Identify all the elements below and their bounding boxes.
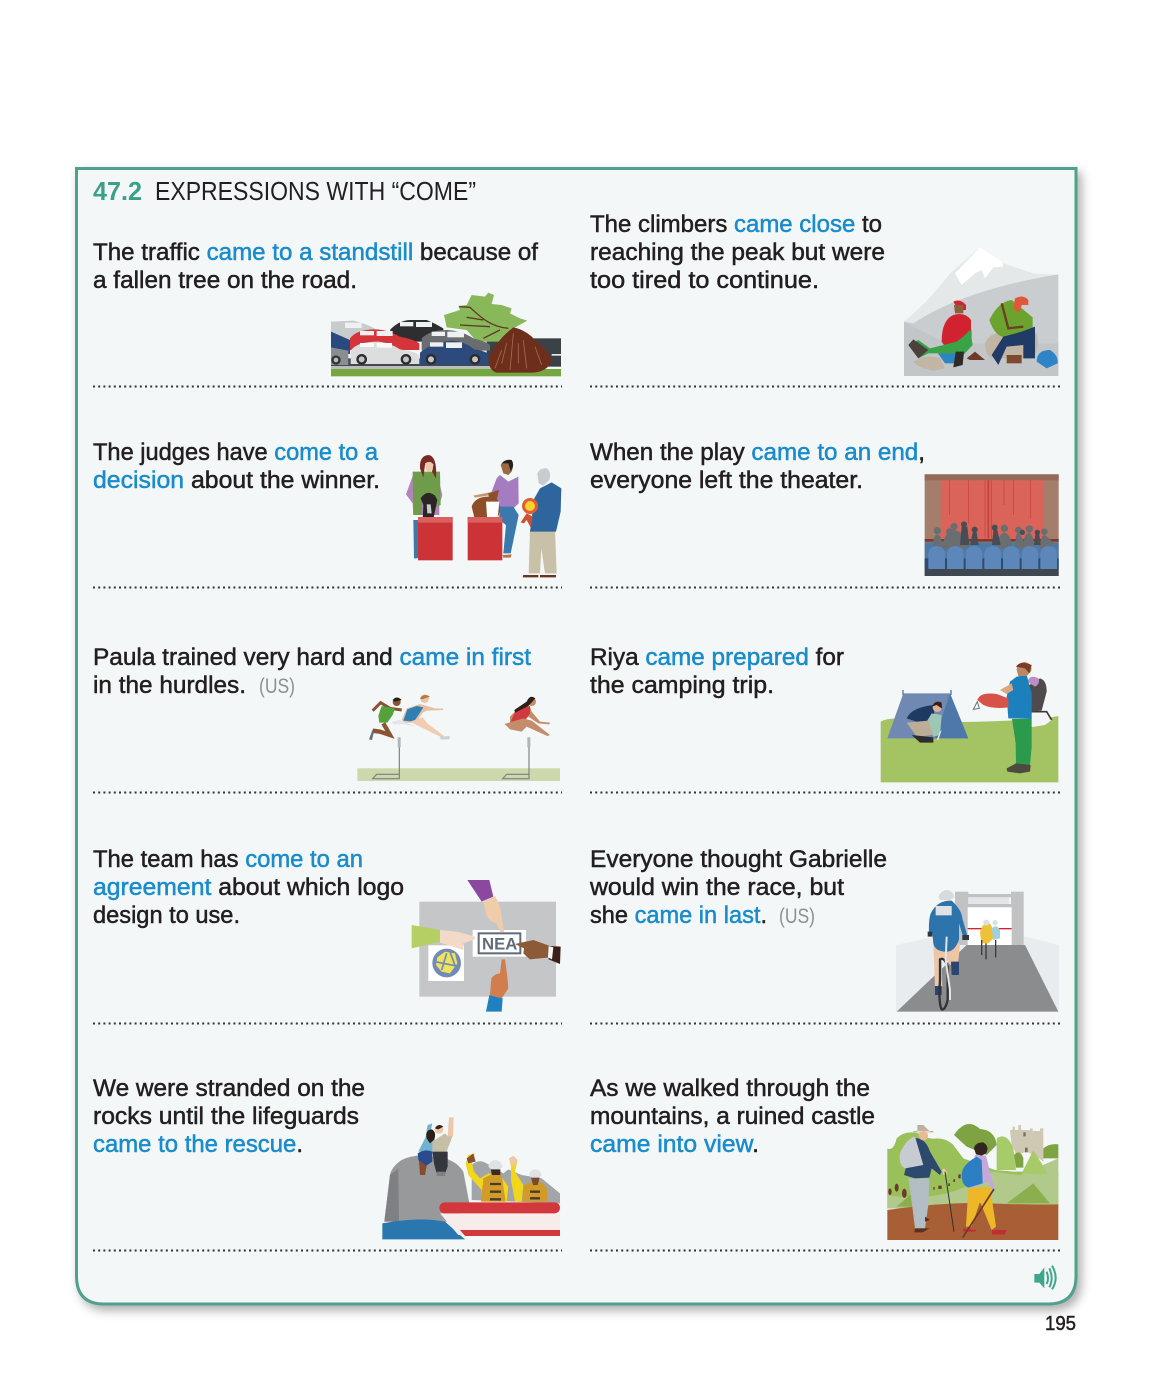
illustration: team choosing a logo: [412, 880, 561, 1012]
panel: expressions with come: [76, 168, 1076, 1304]
text: came to the rescue: rocks until the lifeguards: [93, 1103, 359, 1130]
text: came into view: [590, 1075, 875, 1158]
text: come to an agreement: design to use.: [93, 902, 240, 929]
illustration: theater audience: [925, 474, 1059, 576]
icon: audio speaker: [1034, 1266, 1056, 1289]
text: came to a standstill: [93, 239, 538, 294]
heading: EXPRESSIONS WITH “COME”: [155, 176, 476, 206]
divider row 4 right: [590, 1022, 1060, 1024]
text: came in first: Paula trained very hard and came in first: [93, 644, 531, 671]
illustration: camping trip: [881, 662, 1058, 782]
text: came to the rescue: We were stranded on the: [93, 1075, 365, 1102]
divider row 3 right: [590, 792, 1060, 794]
text: came prepared: [590, 644, 844, 699]
text: came in last: she came in last.: [590, 902, 767, 929]
divider row 4 left: [93, 1022, 562, 1024]
divider row 3 left: [93, 792, 562, 794]
text: came to the rescue: [93, 1075, 365, 1158]
text: came prepared: Riya came prepared for: [590, 644, 844, 671]
text: came to an end: When the play came to an end,: [590, 439, 925, 466]
text: came to the rescue: came to the rescue.: [93, 1131, 303, 1158]
divider row 5 right: [590, 1250, 1060, 1252]
logo lettering: NEA: [482, 934, 517, 953]
text: came to an end: everyone left the theater.: [590, 467, 863, 494]
text: came in last: [589, 846, 887, 929]
text: come to an agreement: agreement about which logo: [93, 874, 404, 901]
illustration: hurdles race: [357, 694, 560, 781]
illustration: tired climbers: [904, 247, 1058, 376]
heading: 47.2: [93, 176, 142, 206]
illustration: cyclists at finish line: [896, 890, 1059, 1012]
text: came into view: As we walked through the: [590, 1075, 870, 1102]
illustration: dog show judges: [406, 455, 561, 577]
divider row 1 left: [93, 386, 562, 388]
divider row 1 right: [590, 386, 1060, 388]
text: came prepared: the camping trip.: [590, 672, 774, 699]
divider row 2 right: [590, 586, 1060, 588]
text: came close: too tired to continue.: [590, 267, 819, 294]
text: came close: reaching the peak but were: [590, 239, 885, 266]
illustration: hikers and castle: [887, 1124, 1058, 1240]
page number: 195: [1045, 1313, 1076, 1335]
divider row 5 left: [93, 1250, 562, 1252]
text: come to an agreement: [93, 846, 404, 929]
text: came in first: [93, 644, 531, 699]
text: came to a standstill: a fallen tree on the road.: [93, 267, 357, 294]
text: came to a standstill: The traffic came to a standstill because of: [93, 239, 538, 266]
text: came close: The climbers came close to: [590, 211, 882, 238]
text: came in last: (US): [779, 905, 815, 928]
text: came in last: would win the race, but: [589, 874, 844, 901]
text: come to a decision: [93, 439, 380, 494]
text: come to a decision: The judges have come to a: [93, 439, 379, 466]
text: came in last: Everyone thought Gabrielle: [590, 846, 887, 873]
text: came into view: mountains, a ruined castle: [590, 1103, 875, 1130]
divider row 2 left: [93, 586, 562, 588]
illustration: lifeguards rescue: [382, 1117, 560, 1239]
illustration: traffic jam and fallen tree: [331, 293, 561, 376]
text: come to a decision: decision about the winner.: [93, 467, 380, 494]
text: came in first: (US): [259, 675, 295, 698]
text: came in first: in the hurdles.: [93, 672, 246, 699]
text: came into view: came into view.: [590, 1131, 759, 1158]
text: come to an agreement: The team has come to an: [93, 846, 363, 873]
text: came close: [590, 211, 885, 294]
text: came to an end: [590, 439, 925, 494]
